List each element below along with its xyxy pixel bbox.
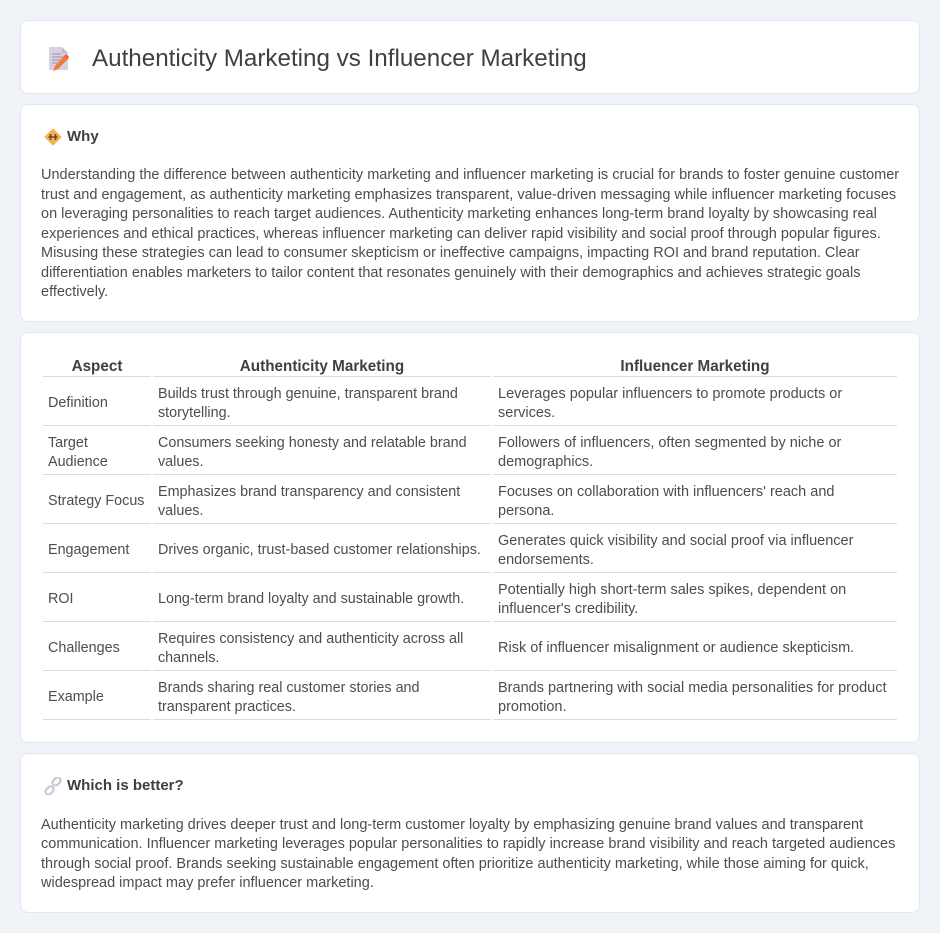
row: example: Brands partnering with social media personalities for product (498, 680, 886, 696)
text block: why (41, 167, 899, 300)
text block: which is better: through social proof. Brands seeking sustainable engagement often prioritize authenticity marketing, while those aiming for quick, (41, 856, 869, 872)
row: engagement: Engagement (48, 542, 129, 558)
heading: which is better: Which is better? (67, 777, 184, 794)
row: strategy focus: persona. (498, 503, 554, 519)
row: target audience: Followers of influencers, often segmented by niche or (498, 435, 841, 451)
text block: which is better: communication. Influencer marketing leverages popular personalities to rapidly increase brand visibility and reach targeted audiences (41, 836, 895, 852)
row: example (43, 680, 897, 720)
row: engagement (43, 533, 897, 573)
row: strategy focus: Focuses on collaboration with influencers' reach and (498, 484, 834, 500)
icon: warning diamond (44, 128, 62, 146)
text block: why: experiences and ethical practices, whereas influencer marketing can deliver rapid visibility and social proof through popular figures. (41, 226, 881, 242)
text block: why: Understanding the difference between authenticity marketing and influencer marketing is crucial for brands to foster genuine customer (41, 167, 899, 183)
row: challenges: Requires consistency and authenticity across all (158, 631, 463, 647)
row: challenges (43, 631, 897, 671)
row: challenges: channels. (158, 650, 219, 666)
row: target audience: values. (158, 454, 203, 470)
row: target audience (43, 435, 897, 475)
icon: chain link (44, 777, 62, 795)
text block: which is better: Authenticity marketing drives deeper trust and long-term customer loyalty by emphasizing genuine brand values and transparent (41, 817, 863, 833)
panel: which is better (20, 753, 920, 913)
row: definition: services. (498, 405, 555, 421)
text block: why: trust and engagement, as authenticity marketing emphasizes transparent, value-driven messaging while influencer marketing focuses (41, 187, 896, 203)
row: ROI: ROI (48, 591, 74, 607)
panel: why (20, 104, 920, 322)
row: definition: Definition (48, 395, 108, 411)
row: example: promotion. (498, 699, 567, 715)
row: challenges: Risk of influencer misalignment or audience skepticism. (498, 640, 854, 656)
row: challenges: Challenges (48, 640, 120, 656)
row: target audience: Target (48, 435, 88, 451)
panel: comparison table (20, 332, 920, 743)
row: target audience: Audience (48, 454, 108, 470)
row: ROI (43, 582, 897, 622)
table header: Influencer Marketing (620, 358, 770, 375)
icon: document with pencil (49, 47, 69, 71)
table header: Aspect (72, 358, 122, 375)
text block: why: effectively. (41, 284, 108, 300)
row: engagement: endorsements. (498, 552, 594, 568)
table header (43, 358, 897, 377)
row: ROI: Long-term brand loyalty and sustainable growth. (158, 591, 464, 607)
text block: which is better (41, 817, 895, 891)
row: definition: Leverages popular influencers to promote products or (498, 386, 842, 402)
table header: Authenticity Marketing (240, 358, 404, 375)
text block: why: differentiation enables marketers to tailor content that resonates genuinely with their demographics and achieves strategic goals (41, 265, 860, 281)
title: Authenticity Marketing vs Influencer Marketing (92, 45, 587, 72)
row: target audience: demographics. (498, 454, 593, 470)
row: engagement: Generates quick visibility and social proof via influencer (498, 533, 853, 549)
heading: why: Why (67, 128, 99, 145)
row: ROI: Potentially high short-term sales spikes, dependent on (498, 582, 846, 598)
row: strategy focus: values. (158, 503, 203, 519)
text block: which is better: widespread impact may prefer influencer marketing. (41, 875, 374, 891)
row: example: Example (48, 689, 104, 705)
row: ROI: influencer's credibility. (498, 601, 638, 617)
row: strategy focus (43, 484, 897, 524)
row: strategy focus: Emphasizes brand transparency and consistent (158, 484, 460, 500)
row: definition (43, 386, 897, 426)
row: engagement: Drives organic, trust-based customer relationships. (158, 542, 481, 558)
row: strategy focus: Strategy Focus (48, 493, 144, 509)
text block: why: on leveraging personalities to reach target audiences. Authenticity marketing enhances long-term brand loyalty by showcasing real (41, 206, 877, 222)
text block: why: Misusing these strategies can lead to consumer skepticism or ineffective campaigns, impacting ROI and brand reputation. Clear (41, 245, 860, 261)
row: example: transparent practices. (158, 699, 296, 715)
row: definition: storytelling. (158, 405, 231, 421)
row: example: Brands sharing real customer stories and (158, 680, 420, 696)
row: definition: Builds trust through genuine, transparent brand (158, 386, 458, 402)
row: target audience: Consumers seeking honesty and relatable brand (158, 435, 467, 451)
panel: header (20, 20, 920, 94)
